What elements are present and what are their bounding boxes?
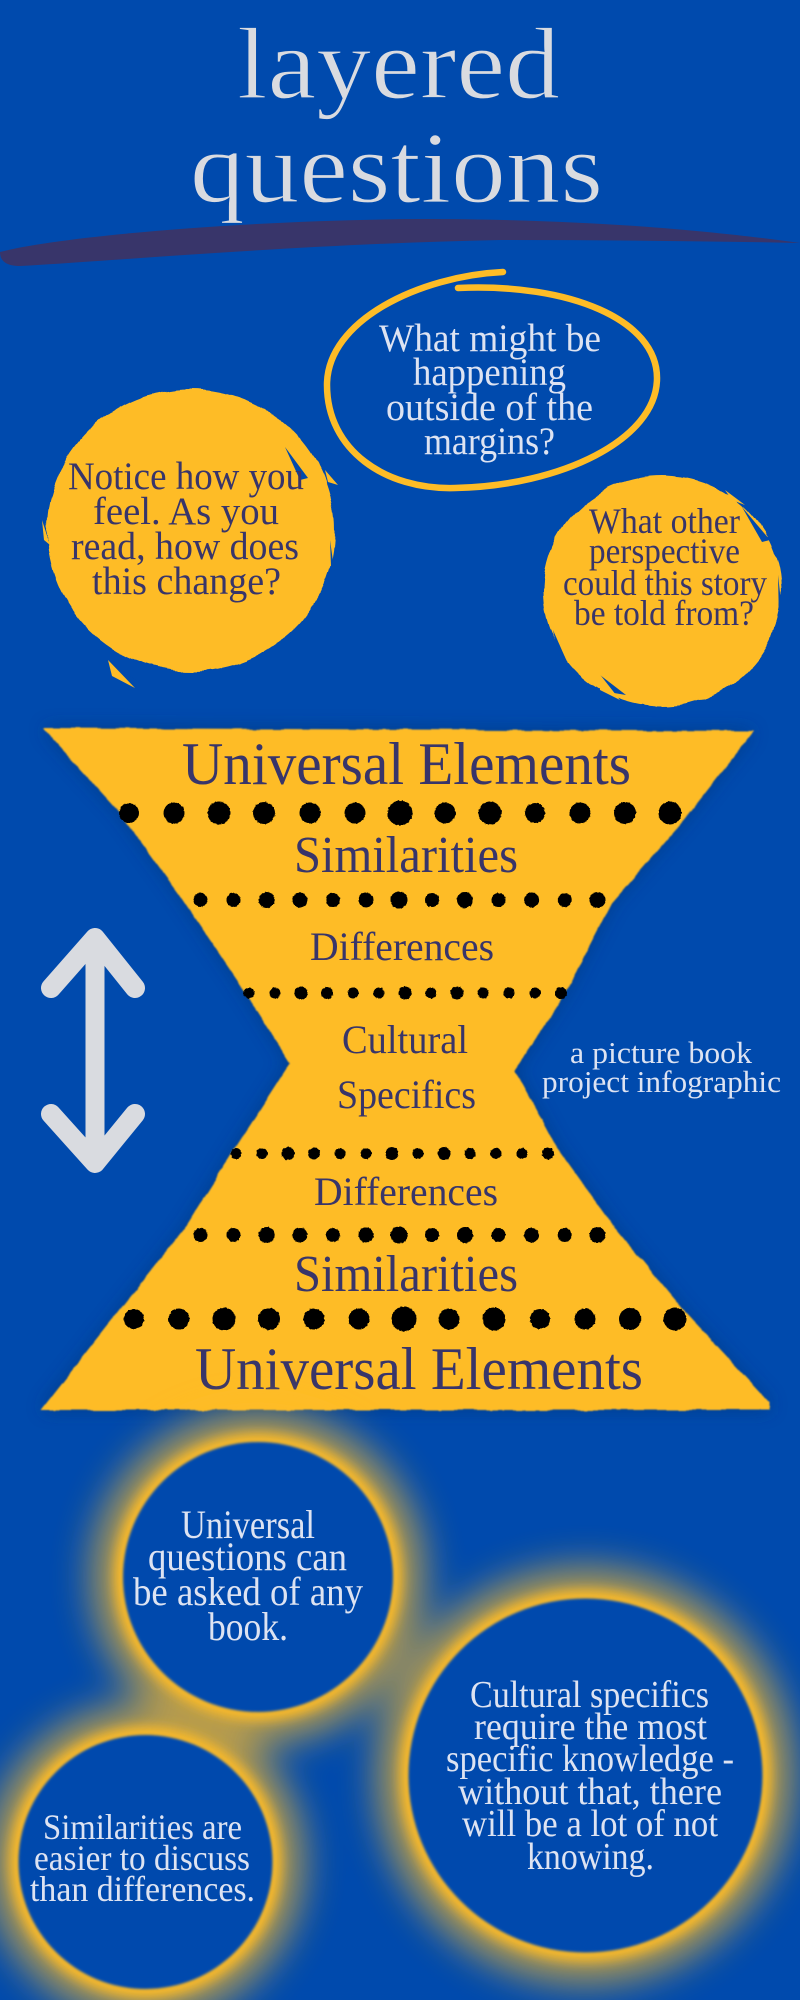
title: layered xyxy=(237,8,560,121)
callout: outlined circle question xyxy=(327,272,657,488)
circle: cultural specifics: specific knowledge - xyxy=(446,1738,734,1780)
callout: yellow brushed circle right xyxy=(543,476,783,706)
brush stroke under title xyxy=(0,219,800,266)
title: questions xyxy=(190,112,603,225)
glow behind bottom circles xyxy=(0,1412,792,2000)
circle: cultural specifics: will be a lot of not xyxy=(462,1803,718,1845)
callout: yellow brushed circle left: Notice how you xyxy=(68,455,304,498)
circle: universal questions: Universal xyxy=(181,1502,315,1547)
hourglass layer labels: Differences xyxy=(314,1169,498,1214)
callout: outlined circle question: outside of the xyxy=(386,386,593,429)
hourglass layer labels: Universal Elements xyxy=(182,731,631,797)
hourglass layer labels: Cultural xyxy=(342,1017,468,1062)
callout: yellow brushed circle left xyxy=(42,389,338,688)
circle: universal questions xyxy=(123,1442,393,1712)
circle: universal questions: questions can xyxy=(148,1534,347,1579)
dotted divider row 3 xyxy=(244,986,567,1000)
circle: cultural specifics xyxy=(408,1598,762,1952)
circle: cultural specifics: Cultural specifics xyxy=(470,1674,709,1716)
callout: yellow brushed circle right: could this story xyxy=(563,563,767,603)
dotted divider row 4 xyxy=(230,1147,554,1160)
circle: similarities xyxy=(18,1735,272,1989)
hourglass layer labels: Differences xyxy=(310,924,494,969)
callout: yellow brushed circle left: this change? xyxy=(92,560,281,603)
circle: cultural specifics: knowing. xyxy=(527,1836,654,1878)
callout: yellow brushed circle left: read, how does xyxy=(71,525,299,568)
circle: universal questions: be asked of any xyxy=(133,1569,363,1614)
circle: universal questions: book. xyxy=(208,1604,288,1649)
callout: yellow brushed circle left: feel. As you xyxy=(93,490,279,533)
callout: yellow brushed circle right: be told from? xyxy=(574,593,754,633)
side caption xyxy=(542,1035,781,1099)
hourglass layer labels xyxy=(182,731,643,1402)
hourglass diagram xyxy=(41,728,770,1410)
circle: cultural specifics: without that, there xyxy=(458,1771,722,1813)
dotted divider row 1 xyxy=(119,800,682,826)
dotted divider row 2 xyxy=(194,892,606,908)
hourglass layer labels: Similarities xyxy=(294,1246,518,1303)
callout: outlined circle question: margins? xyxy=(424,420,555,463)
dotted divider row 6 xyxy=(124,1306,686,1332)
hourglass layer labels: Specifics xyxy=(337,1072,476,1117)
title xyxy=(190,8,603,225)
circle: similarities: easier to discuss xyxy=(34,1838,250,1878)
side caption: a picture book xyxy=(570,1035,753,1070)
circle: similarities: than differences. xyxy=(30,1869,255,1909)
hourglass layer labels: Universal Elements xyxy=(195,1336,643,1402)
circle: similarities: Similarities are xyxy=(43,1807,242,1847)
hourglass layer labels: Similarities xyxy=(294,827,518,884)
dotted divider row 5 xyxy=(194,1226,606,1244)
callout: outlined circle question: What might be xyxy=(379,317,601,360)
side caption: project infographic xyxy=(542,1064,781,1099)
icon: double-headed arrow xyxy=(51,938,135,1163)
callout: outlined circle question: happening xyxy=(413,351,566,394)
callout: yellow brushed circle right: perspective xyxy=(589,531,740,571)
circle: cultural specifics: require the most xyxy=(474,1706,707,1748)
callout: yellow brushed circle right: What other xyxy=(589,501,740,541)
